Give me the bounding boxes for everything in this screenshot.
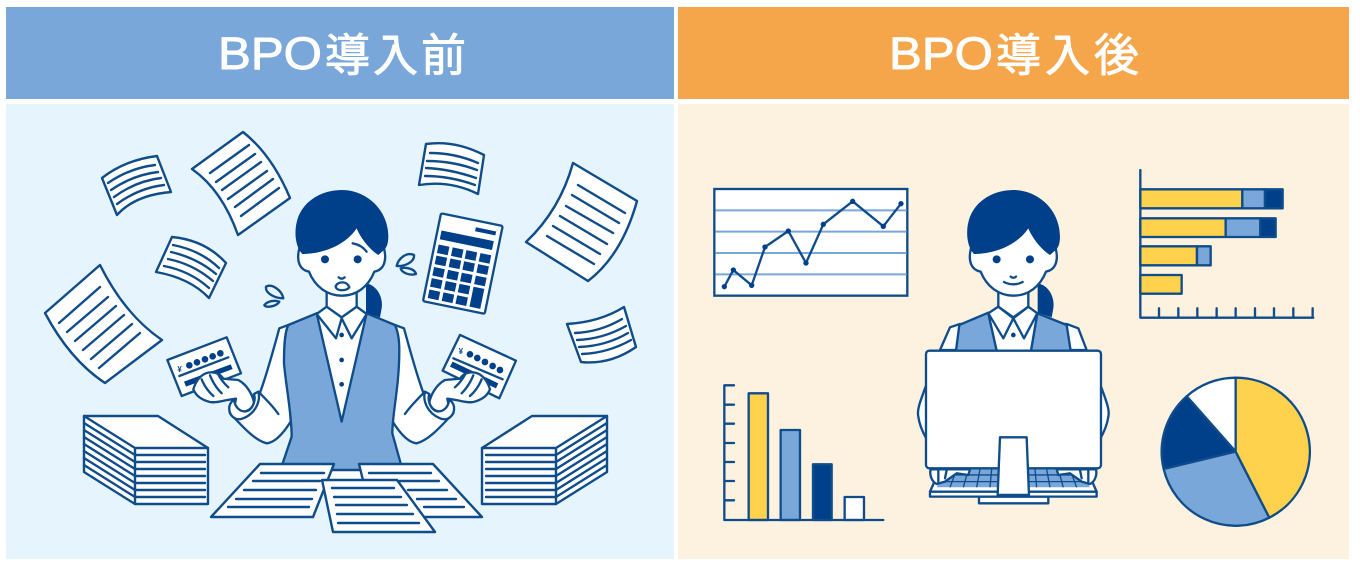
torso and arms [167, 307, 516, 471]
header bar: before [6, 7, 674, 99]
icon: flying paper top [192, 132, 290, 235]
heading: BPO導入後: BPO [889, 28, 993, 79]
vertical bar chart [724, 385, 883, 520]
hair [295, 190, 388, 255]
heading: BPO導入前: BPO [218, 28, 322, 79]
pie chart [1162, 378, 1310, 526]
heading: BPO導入前: 導入前 [325, 30, 466, 81]
panel background: after [678, 104, 1349, 559]
eyes [993, 255, 1034, 263]
head [264, 190, 416, 317]
icon: flying paper large left [45, 265, 162, 383]
desk paper right [359, 464, 482, 517]
header bar: after [678, 7, 1349, 99]
heading: BPO導入後: 導入後 [996, 30, 1139, 81]
left card and hand: ¥ [177, 365, 182, 374]
neck [998, 292, 1028, 317]
face fill [970, 223, 1057, 296]
stacked horizontal bar chart [1140, 170, 1313, 318]
hair [967, 190, 1060, 255]
collar [988, 307, 1037, 338]
icon: flying paper large right [526, 163, 637, 281]
icon: flying paper top centre [419, 143, 484, 194]
face fill [298, 223, 385, 296]
ponytail [1038, 283, 1054, 317]
vest [956, 313, 1071, 351]
left sleeve [230, 325, 291, 443]
neck [327, 292, 357, 317]
ponytail [366, 283, 382, 317]
collar [317, 307, 367, 338]
icon: flying paper middle [156, 237, 226, 298]
character: calm worker at computer [918, 190, 1109, 503]
right card and hand: ¥ [459, 347, 464, 356]
character: stressed office worker [167, 190, 516, 471]
icon: paper stack left [84, 416, 208, 504]
sweat drops [264, 254, 416, 307]
shirt buttons [339, 333, 344, 387]
desk papers [211, 464, 482, 532]
arms [940, 324, 1087, 350]
monitor stand [998, 437, 1029, 495]
eyes [321, 255, 362, 263]
face and ears outline [970, 248, 1057, 296]
nose [339, 277, 345, 279]
right card and hand [424, 335, 516, 419]
keyboard [930, 469, 1097, 503]
shirt front [317, 313, 367, 422]
face and ears outline [298, 248, 385, 296]
icon: calculator [423, 213, 503, 314]
vest [283, 313, 401, 471]
icon: paper stack right [482, 416, 607, 504]
icon: flying paper bottom right [567, 307, 636, 362]
desk paper left [211, 464, 334, 517]
monitor [926, 351, 1101, 468]
worried brow [353, 243, 367, 252]
shirt front [988, 313, 1037, 351]
hands [930, 469, 1096, 484]
mouth [336, 282, 349, 290]
panel: after BPO [678, 7, 1349, 559]
line chart [714, 189, 907, 296]
desk paper centre [322, 480, 435, 532]
left card and hand [167, 337, 259, 419]
nose and smile [1004, 277, 1023, 284]
panel: before BPO [6, 7, 674, 559]
panel background: before [6, 104, 674, 559]
right sleeve [393, 325, 453, 443]
icon: flying paper small top left [102, 156, 171, 215]
